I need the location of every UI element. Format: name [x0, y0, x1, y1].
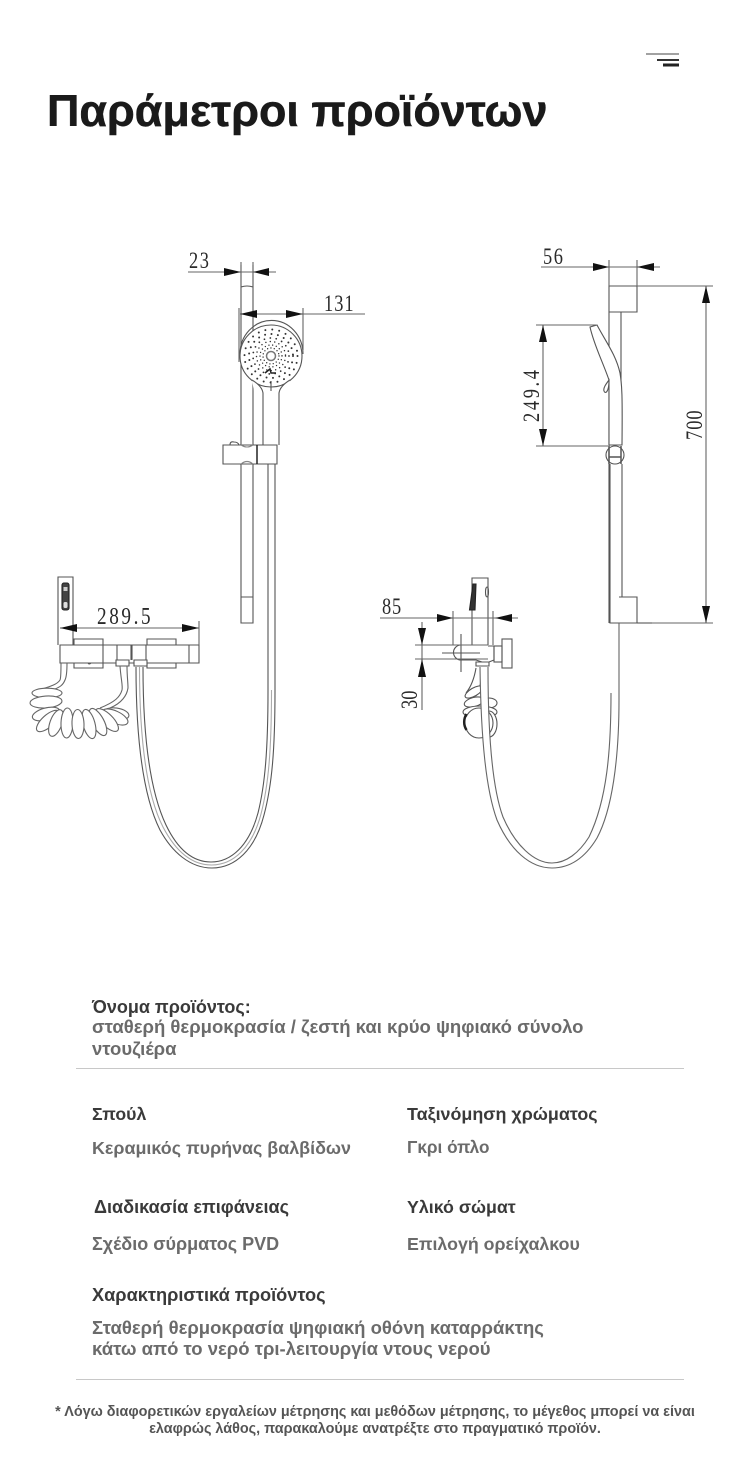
dimension: 30	[396, 622, 488, 710]
product name value: ντουζιέρα	[92, 1038, 176, 1059]
title: Παράμετροι προϊόντων	[47, 85, 547, 136]
shower head	[240, 320, 303, 445]
spec: surface process	[92, 1197, 289, 1254]
dimension: 56: 56	[543, 243, 563, 270]
footnote: ελαφρώς λάθος, παρακαλούμε ανατρέξτε στο πραγματικό προϊόν.	[149, 1421, 601, 1437]
dimension: 289.5: 289.5	[97, 603, 151, 630]
footnote: * Λόγω διαφορετικών εργαλείων μέτρησης και μεθόδων μέτρησης, το μέγεθος μπορεί να είναι	[55, 1404, 695, 1420]
rail and brackets	[609, 286, 637, 623]
spec: surface process: Σχέδιο σύρματος PVD	[92, 1234, 279, 1254]
dimension: 30: 30	[396, 691, 423, 709]
spec: product features: Σταθερή θερμοκρασία ψηφιακή οθόνη καταρράκτης	[92, 1317, 544, 1338]
dimension: 700: 700	[681, 410, 708, 440]
spec: spool: Κεραμικός πυρήνας βαλβίδων	[92, 1138, 351, 1158]
side view: valve and spray	[442, 578, 619, 868]
dimension: 85: 85	[382, 593, 401, 620]
dimension: 700	[637, 286, 713, 623]
mixer valve	[60, 639, 199, 668]
product name label: Όνομα προϊόντος:	[92, 997, 251, 1017]
hand spray	[58, 577, 73, 645]
icon: menu	[646, 54, 679, 66]
spec: product features: Χαρακτηριστικά προϊόντος	[92, 1285, 326, 1305]
spec: product features	[92, 1285, 544, 1359]
dimension: 131: 131	[324, 290, 354, 317]
slide bar	[241, 265, 253, 623]
spec: surface process: Διαδικασία επιφάνειας	[94, 1197, 289, 1217]
product name block	[92, 997, 583, 1059]
spec: body material: Υλικό σώματ	[407, 1197, 516, 1217]
hose	[136, 464, 275, 868]
spec: spool	[92, 1104, 351, 1158]
dimension: 249.4: 249.4	[518, 369, 545, 422]
spec: colour: Ταξινόμηση χρώματος	[407, 1104, 598, 1124]
footnote	[55, 1404, 695, 1437]
side view: shower set	[590, 286, 652, 623]
spec: spool: Σπούλ	[92, 1104, 146, 1124]
product name value: σταθερή θερμοκρασία / ζεστή και κρύο ψηφιακό σύνολο	[92, 1016, 583, 1037]
dimension: 249.4	[518, 325, 608, 446]
dimension: 23	[188, 247, 276, 276]
dimension: 56	[541, 243, 660, 286]
side coil	[463, 668, 497, 738]
spec: colour	[407, 1104, 598, 1157]
dimension: 131	[239, 290, 365, 362]
spec: product features: κάτω από το νερό τρι-λειτουργία ντους νερού	[92, 1338, 491, 1359]
technical drawing	[30, 243, 713, 868]
dimension: 289.5	[60, 603, 199, 645]
side hose	[484, 667, 500, 819]
coiled hose	[30, 663, 130, 740]
spec: colour: Γκρι όπλο	[407, 1137, 490, 1157]
spec: body material	[407, 1197, 580, 1254]
product name value	[92, 1016, 583, 1059]
spec: body material: Επιλογή ορείχαλκου	[407, 1234, 580, 1254]
side shower head	[590, 325, 622, 445]
bar clamp	[230, 442, 239, 445]
dimension: 23: 23	[189, 247, 209, 274]
dimension: 85	[380, 593, 518, 645]
front view: shower set	[136, 265, 303, 868]
